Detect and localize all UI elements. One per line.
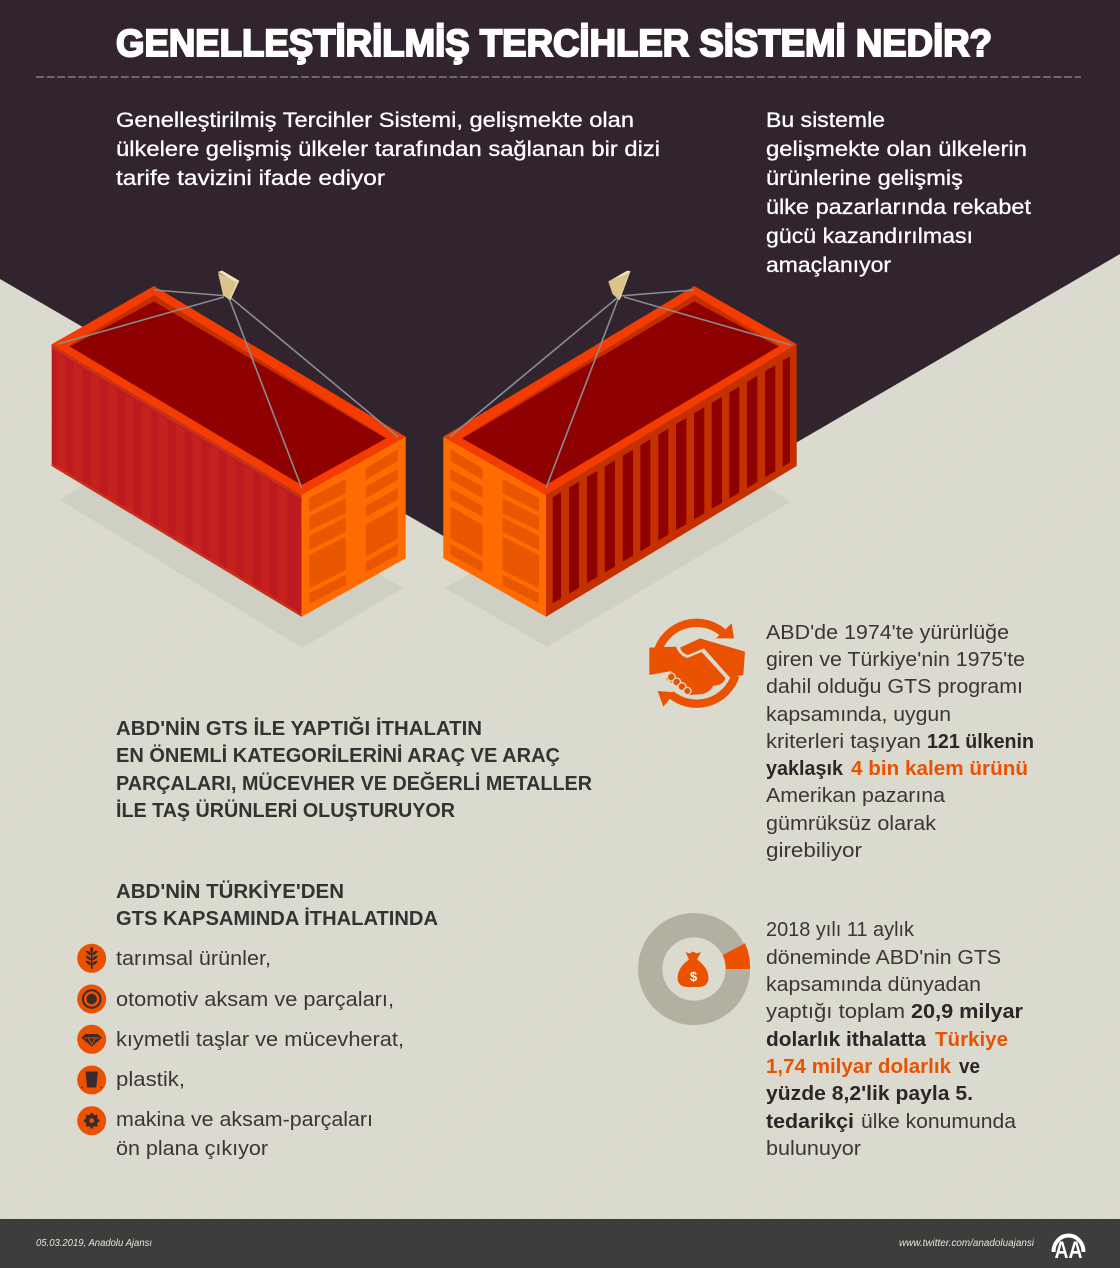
heading: categories: ABD'NİN GTS İLE YAPTIĞI İTHALATIN — [116, 716, 482, 740]
text: GTS program — [766, 622, 1034, 862]
text: GTS program: giren ve Türkiye'nin 1975'te — [766, 649, 1025, 671]
hook left — [218, 270, 239, 300]
icon: cup — [77, 1066, 106, 1094]
icon: money bag: $ — [690, 969, 698, 984]
list item: plastic — [77, 1066, 185, 1094]
list item: machinery: makina ve aksam-parçaları — [116, 1109, 373, 1131]
list item: automotive — [77, 984, 394, 1014]
icon: diamond — [77, 1025, 106, 1054]
footer date and source: 05.03.2019, Anadolu Ajansı — [36, 1238, 152, 1249]
intro text right: gelişmekte olan ülkelerin — [766, 138, 1027, 161]
ropes right — [450, 290, 791, 488]
list item: machinery — [77, 1106, 373, 1160]
container left — [52, 270, 406, 617]
text: import figures: yaptığı toplam — [766, 1001, 905, 1023]
intro text left — [116, 109, 660, 190]
list item: agriculture — [77, 944, 271, 973]
heading: Turkey imports: ABD'NİN TÜRKİYE'DEN — [116, 880, 344, 903]
list item: gems: kıymetli taşlar ve mücevherat, — [116, 1029, 404, 1051]
icon: AA logo: AA — [1054, 1237, 1082, 1264]
background dark top panel — [0, 0, 1120, 592]
icon: gear — [77, 1106, 106, 1135]
text: GTS program: dahil olduğu GTS programı — [766, 676, 1023, 698]
hook right — [608, 271, 630, 300]
intro text right — [766, 109, 1031, 277]
container right — [443, 271, 797, 617]
text: import figures — [766, 919, 1023, 1160]
heading: categories — [116, 716, 592, 822]
text: import figures: döneminde ABD'nin GTS — [766, 947, 1001, 969]
container shadow left — [60, 440, 403, 648]
intro text right: gücü kazandırılması — [766, 225, 973, 248]
text: import figures: ülke konumunda — [861, 1111, 1017, 1133]
text: GTS program: 4 bin kalem ürünü — [851, 758, 1028, 780]
footer — [0, 1219, 1120, 1268]
intro text right: Bu sistemle — [766, 109, 885, 132]
icon: handshake with circular arrows — [649, 623, 745, 707]
heading: Turkey imports — [116, 880, 438, 930]
top rim right — [443, 286, 797, 495]
icon: wheat — [77, 944, 106, 973]
text: GTS program: gümrüksüz olarak — [766, 813, 937, 835]
icon: wheel — [77, 984, 106, 1014]
text: import figures: Türkiye — [935, 1029, 1008, 1051]
intro text left: Genelleştirilmiş Tercihler Sistemi, gelişmekte olan — [116, 109, 634, 132]
front doors left — [302, 437, 406, 617]
title: GENELLEŞTİRİLMİŞ TERCİHLER SİSTEMİ NEDİR? — [116, 23, 992, 65]
text: import figures: dolarlık ithalatta — [766, 1029, 927, 1051]
footer url: www.twitter.com/anadoluajansi — [899, 1238, 1035, 1249]
text: GTS program: girebiliyor — [766, 840, 862, 862]
intro text left: ülkelere gelişmiş ülkeler tarafından sağlanan bir dizi — [116, 138, 660, 161]
heading: categories: İLE TAŞ ÜRÜNLERİ OLUŞTURUYOR — [116, 799, 455, 822]
ropes left — [58, 290, 398, 488]
list item: automotive: otomotiv aksam ve parçaları, — [116, 989, 394, 1011]
text: import figures: kapsamında dünyadan — [766, 974, 981, 996]
container shadow right — [445, 440, 790, 647]
intro text right: ürünlerine gelişmiş — [766, 167, 963, 190]
text: import figures: tedarikçi — [766, 1111, 854, 1133]
container floor right — [462, 302, 778, 485]
front doors right — [443, 437, 546, 617]
donut chart with money bag — [650, 925, 750, 1013]
heading: categories: EN ÖNEMLİ KATEGORİLERİNİ ARAÇ VE ARAÇ — [116, 744, 560, 767]
heading: categories: PARÇALARI, MÜCEVHER VE DEĞERLİ METALLER — [116, 771, 592, 795]
text: import figures: 20,9 milyar — [911, 1001, 1023, 1023]
text: import figures: bulunuyor — [766, 1138, 861, 1160]
text: GTS program: kapsamında, uygun — [766, 704, 951, 726]
text: import figures: 2018 yılı 11 aylık — [766, 919, 915, 941]
heading: Turkey imports: GTS KAPSAMINDA İTHALATINDA — [116, 907, 438, 930]
list item: gems — [77, 1025, 404, 1054]
intro text right: ülke pazarlarında rekabet — [766, 196, 1031, 219]
top rim left — [52, 286, 406, 495]
side wall left — [52, 344, 302, 617]
text: GTS program: kriterleri taşıyan — [766, 731, 921, 753]
text: GTS program: yaklaşık — [766, 758, 844, 780]
intro text left: tarife tavizini ifade ediyor — [116, 167, 385, 190]
list item: plastic: plastik, — [116, 1069, 185, 1091]
intro text right: amaçlanıyor — [766, 254, 891, 277]
container floor left — [70, 302, 386, 485]
text: GTS program: ABD'de 1974'te yürürlüğe — [766, 622, 1009, 644]
list item: agriculture: tarımsal ürünler, — [116, 948, 271, 970]
text: GTS program: Amerikan pazarına — [766, 785, 946, 807]
text: import figures: 1,74 milyar dolarlık — [766, 1056, 952, 1078]
text: import figures: ve — [959, 1056, 980, 1078]
text: GTS program: 121 ülkenin — [927, 731, 1034, 753]
text: import figures: yüzde 8,2'lik payla 5. — [766, 1083, 973, 1105]
list item: machinery: ön plana çıkıyor — [116, 1138, 268, 1160]
donut slice: Turkey share — [723, 943, 750, 969]
side wall right — [546, 344, 797, 617]
